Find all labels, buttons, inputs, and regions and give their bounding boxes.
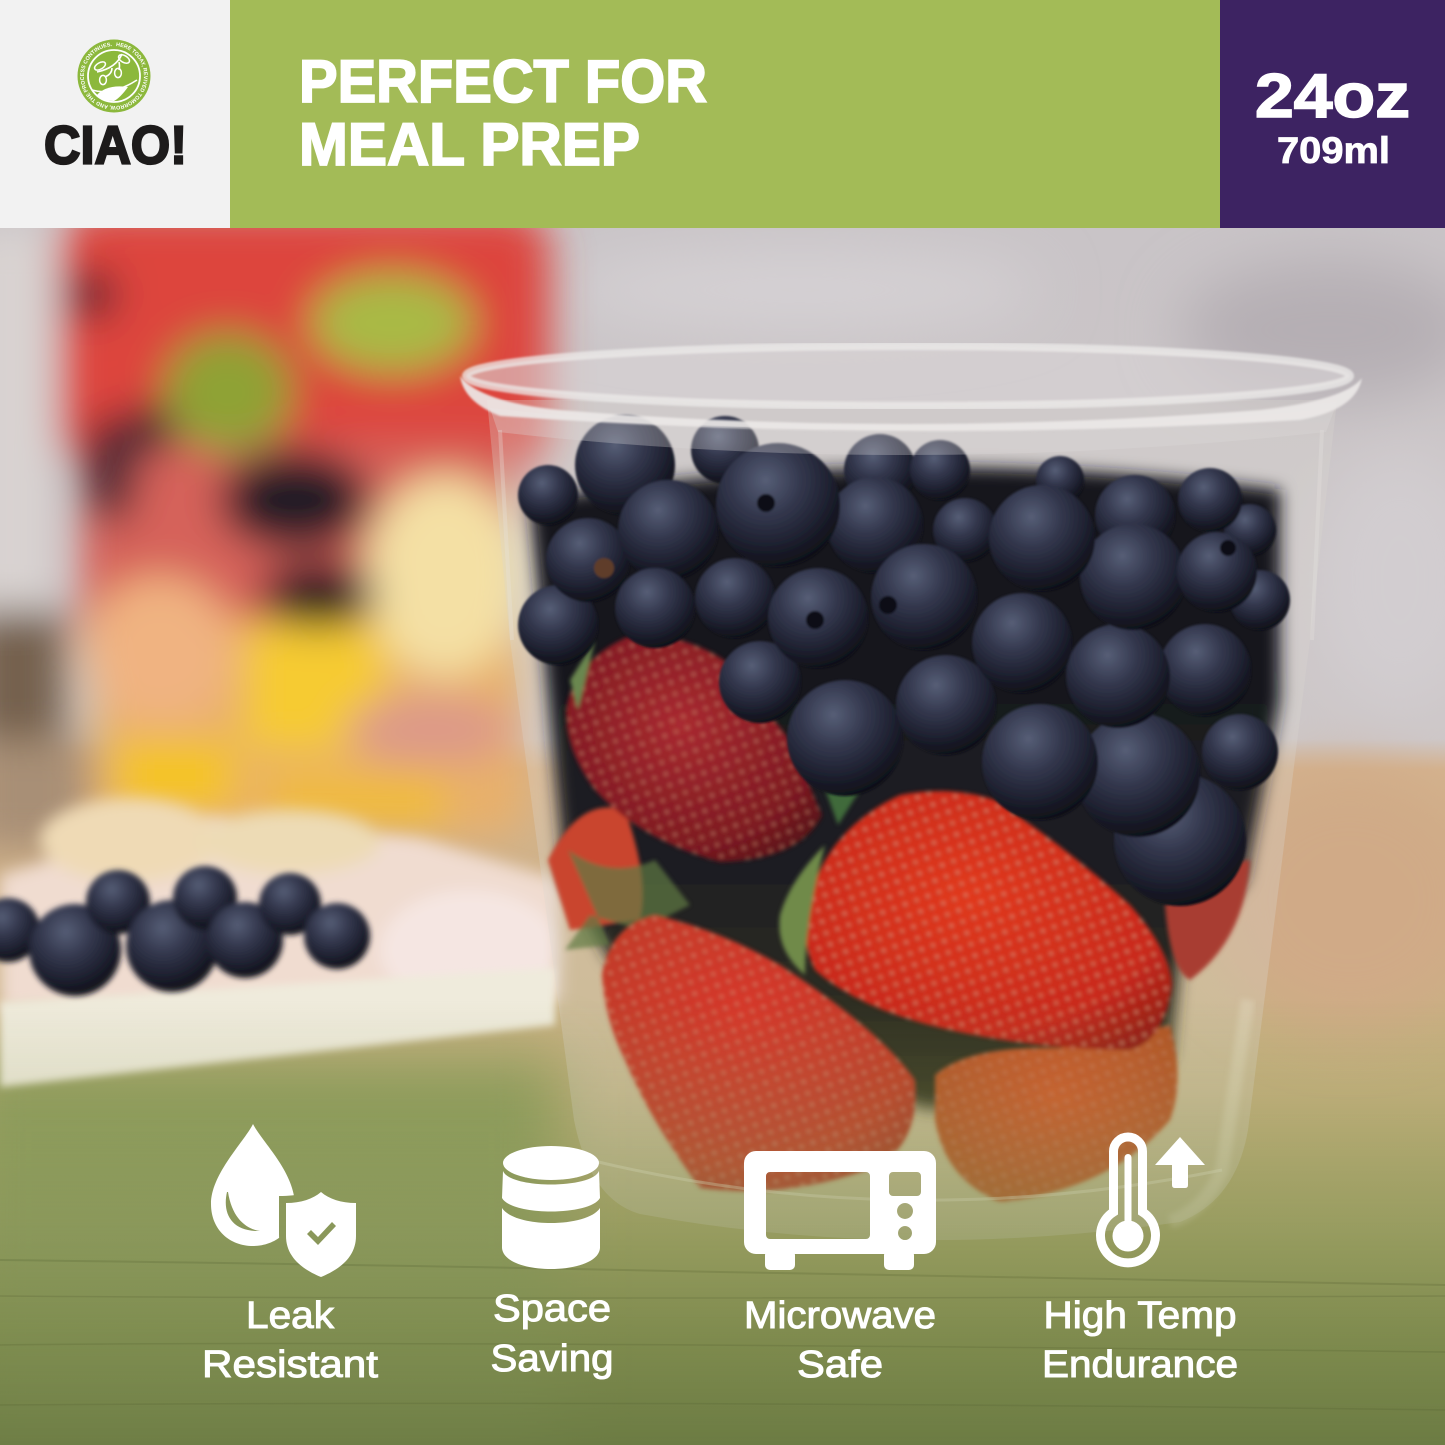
container lid and highlights bbox=[500, 430, 1322, 640]
strawberries bbox=[548, 632, 1250, 1202]
headline bbox=[299, 48, 707, 178]
strawberry: bottom orange bbox=[935, 1025, 1178, 1202]
clear container with fruit bbox=[460, 346, 1362, 1240]
wood grain lines bbox=[0, 1260, 1445, 1410]
label bbox=[202, 1295, 378, 1386]
panel: logo bbox=[0, 0, 230, 228]
label: Saving bbox=[490, 1338, 614, 1380]
blueberries bbox=[518, 415, 1290, 906]
container body bbox=[487, 400, 1337, 1240]
white plate bbox=[0, 798, 560, 1087]
icon: thermometer with arrow bbox=[1100, 1137, 1205, 1263]
bottom green fade bbox=[0, 1000, 1445, 1445]
label: Leak bbox=[246, 1295, 335, 1337]
feature: space saving bbox=[490, 1146, 614, 1380]
brand name: CIAO! bbox=[44, 116, 187, 176]
logo badge: HERE TODAY, REVIVED TOMORROW, AND THE PROCESS CONTINUES. bbox=[80, 42, 148, 110]
label: Microwave bbox=[744, 1295, 936, 1337]
feature: high temp endurance bbox=[1042, 1137, 1238, 1386]
headline: MEAL PREP bbox=[299, 111, 640, 178]
panel: size badge bbox=[1220, 0, 1445, 228]
headline: PERFECT FOR bbox=[299, 48, 707, 115]
leaves bbox=[779, 845, 825, 975]
feature: microwave safe bbox=[744, 1151, 936, 1386]
icon: stacked discs bbox=[502, 1146, 600, 1269]
strawberry: upper dark bbox=[566, 632, 822, 862]
label: Space bbox=[493, 1288, 611, 1330]
label: Resistant bbox=[202, 1344, 378, 1386]
panel: headline banner bbox=[230, 0, 1220, 228]
label: Endurance bbox=[1042, 1344, 1238, 1386]
strawberry: right bright bbox=[805, 791, 1172, 1050]
strawberry: small side bbox=[548, 807, 643, 930]
icon: droplet and shield bbox=[211, 1124, 356, 1277]
strawberry: bottom left bbox=[602, 915, 916, 1191]
label bbox=[744, 1295, 936, 1386]
label bbox=[490, 1288, 614, 1380]
label: High Temp bbox=[1044, 1295, 1236, 1337]
label bbox=[1042, 1295, 1238, 1386]
feature: leak resistant bbox=[202, 1124, 378, 1386]
size oz: 24oz bbox=[1255, 62, 1410, 131]
size ml: 709ml bbox=[1277, 130, 1390, 171]
icon: microwave bbox=[744, 1151, 936, 1270]
label: Safe bbox=[797, 1344, 883, 1386]
